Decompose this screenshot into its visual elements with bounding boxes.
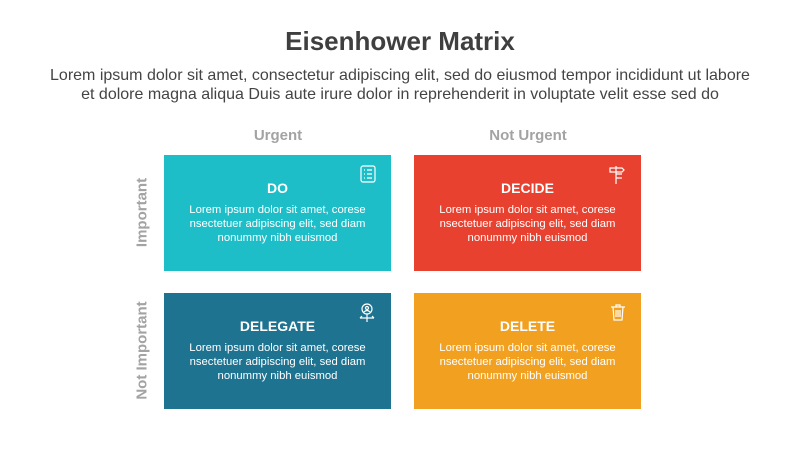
panel: delegate: nonummy nibh euismod xyxy=(218,370,337,382)
icon: checklist xyxy=(360,165,376,183)
panel: do: DO xyxy=(267,180,288,196)
panel: delegate: DELEGATE xyxy=(240,318,315,334)
row label: important: Important xyxy=(134,178,150,247)
panel: delete: nsectetuer adipiscing elit, sed diam xyxy=(440,356,615,368)
panel: do xyxy=(164,155,391,271)
panel: delegate xyxy=(164,293,391,409)
panel: delete: DELETE xyxy=(500,318,555,334)
panel: delete: Lorem ipsum dolor sit amet, corese xyxy=(439,342,616,354)
icon: person network xyxy=(360,303,374,322)
panel: decide: Lorem ipsum dolor sit amet, corese xyxy=(439,204,616,216)
column label: not urgent: Not Urgent xyxy=(489,127,567,144)
subtitle: Lorem ipsum dolor sit amet, consectetur adipiscing elit, sed do eiusmod tempor incididunt ut labore xyxy=(50,67,750,84)
panel: delete: nonummy nibh euismod xyxy=(468,370,587,382)
panel: delegate: nsectetuer adipiscing elit, sed diam xyxy=(190,356,365,368)
panel: delete xyxy=(414,293,641,409)
panel: decide: DECIDE xyxy=(501,180,554,196)
panel: decide: nonummy nibh euismod xyxy=(468,232,587,244)
title: Eisenhower Matrix xyxy=(285,26,515,56)
subtitle: et dolore magna aliqua Duis aute irure dolor in reprehenderit in voluptate velit esse sed do xyxy=(81,86,719,102)
panel: do: nsectetuer adipiscing elit, sed diam xyxy=(190,218,365,230)
panel: do: Lorem ipsum dolor sit amet, corese xyxy=(189,204,366,216)
icon: signpost xyxy=(609,166,625,184)
panel: delegate: Lorem ipsum dolor sit amet, corese xyxy=(189,342,366,354)
row label: not important: Not Important xyxy=(134,301,150,400)
icon: trash xyxy=(611,304,625,321)
panel: decide: nsectetuer adipiscing elit, sed diam xyxy=(440,218,615,230)
panel: do: nonummy nibh euismod xyxy=(218,232,337,244)
panel: decide xyxy=(414,155,641,271)
subtitle xyxy=(50,67,750,102)
column label: urgent: Urgent xyxy=(254,127,302,144)
